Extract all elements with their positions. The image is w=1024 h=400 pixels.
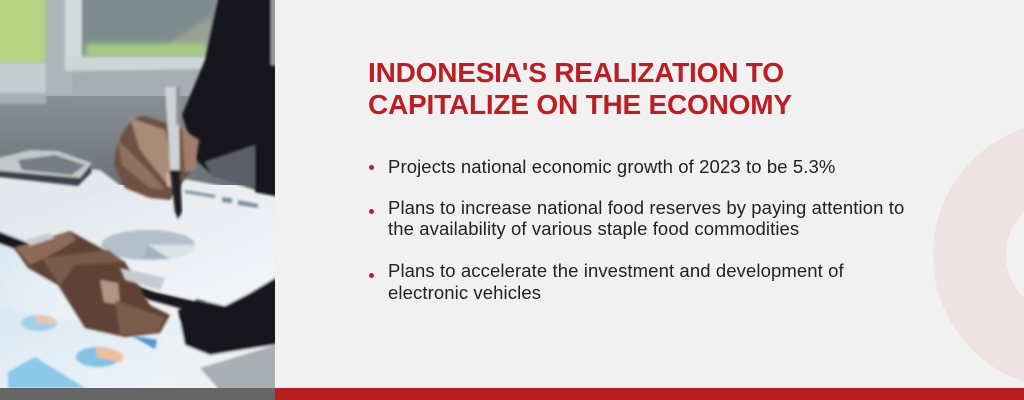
holding hand [14,231,170,337]
dark suit [178,0,285,360]
bullet 3 [369,260,844,303]
clipboard papers [0,178,285,400]
chart bars on clipboard [185,190,258,208]
bullet 2: the availability of various staple food commodities [388,218,799,239]
calculator [0,150,92,186]
title [368,57,792,120]
title: INDONESIA'S REALIZATION TO [368,57,784,88]
title: CAPITALIZE ON THE ECONOMY [368,89,792,120]
footer bar: grey [0,388,275,400]
window frame [0,0,212,104]
bullet 2: Plans to increase national food reserves by paying attention to [388,197,904,218]
small charts [8,315,157,388]
clip [25,233,165,290]
desk [0,160,140,240]
decorative ring [933,128,1024,382]
pie chart on clipboard [101,230,195,260]
writing hand [114,116,200,200]
window and wall background [0,0,275,185]
bullet 2 [369,197,904,239]
bullet 1: Projects national economic growth of 2023 to be 5.3% [388,156,835,177]
pen [165,87,182,219]
bullet 3: electronic vehicles [388,282,541,303]
photo: businessperson reviewing charts [0,0,275,388]
bullet 3: Plans to accelerate the investment and development of [388,260,844,281]
footer bar: red [275,388,1024,400]
